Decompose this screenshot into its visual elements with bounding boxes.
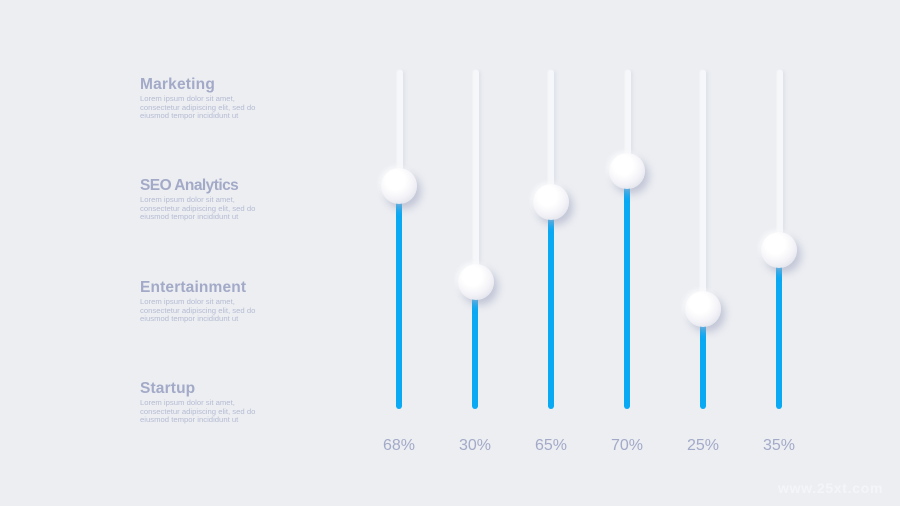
chart: slider 30% [458,70,501,454]
chart: slider 30%: 30% [459,437,491,454]
text block: Startup: Startup [140,380,195,397]
chart: slider 68% [381,70,424,454]
text block: Marketing: Marketing [140,76,215,93]
text block: Entertainment: Lorem ipsum dolor sit amet, [140,297,235,306]
chart: slider 70% [609,70,652,454]
text block: Startup [140,380,255,424]
text block: SEO Analytics: Lorem ipsum dolor sit amet, [140,195,235,204]
text block: Entertainment: consectetur adipiscing elit, sed do [140,306,255,315]
chart: slider 65% [533,70,576,454]
text block: Entertainment: eiusmod tempor incididunt ut [140,314,238,323]
chart: slider 35%: 35% [763,437,795,454]
chart: slider 65%: 65% [535,437,567,454]
chart: slider 70%: 70% [611,437,643,454]
text block: SEO Analytics [140,177,255,221]
text block: Marketing: Lorem ipsum dolor sit amet, [140,94,235,103]
text block: Entertainment [140,279,255,323]
text block: Marketing [140,76,255,120]
text block: Startup: consectetur adipiscing elit, sed do [140,407,255,416]
text block: Entertainment: Entertainment [140,279,246,296]
chart: slider 68%: 68% [383,437,415,454]
chart: slider 25%: 25% [687,437,719,454]
text block: SEO Analytics: consectetur adipiscing elit, sed do [140,204,255,213]
text block: Startup: eiusmod tempor incididunt ut [140,415,238,424]
watermark: www.25xt.com [778,480,883,496]
panel: category list [140,76,255,424]
chart: slider 25% [685,70,728,454]
text block: Marketing: consectetur adipiscing elit, sed do [140,103,255,112]
text block: Marketing: eiusmod tempor incididunt ut [140,111,238,120]
text block: Startup: Lorem ipsum dolor sit amet, [140,398,235,407]
text block: SEO Analytics: eiusmod tempor incididunt ut [140,212,238,221]
text block: SEO Analytics: SEO Analytics [140,177,238,194]
chart: slider 35% [761,70,804,454]
